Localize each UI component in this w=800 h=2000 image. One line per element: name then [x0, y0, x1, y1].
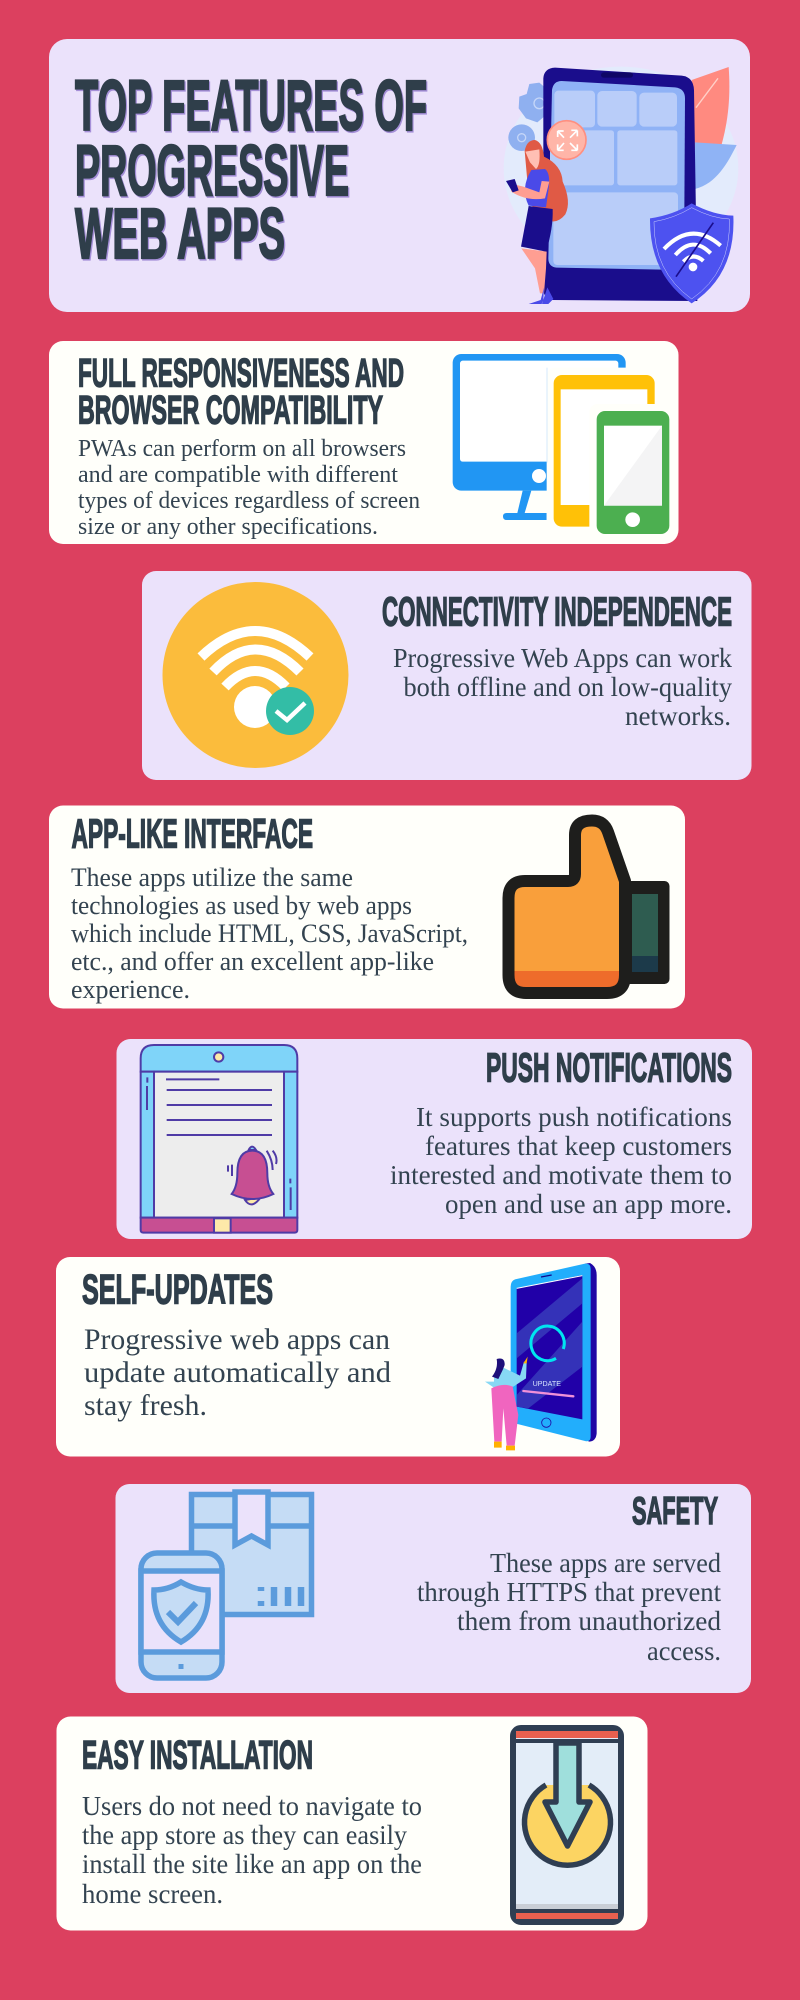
body text: These apps utilize the same [71, 863, 353, 892]
panel: title [49, 39, 750, 312]
body text: etc., and offer an excellent app-like [71, 947, 434, 976]
body text: them from unauthorized [457, 1606, 722, 1636]
body text: through HTTPS that prevent [417, 1577, 721, 1607]
body text: install the site like an app on the [82, 1849, 422, 1879]
body text: both offline and on low-quality [404, 672, 732, 702]
body text [390, 1102, 732, 1219]
body text: interested and motivate them to [390, 1160, 732, 1190]
body text: home screen. [82, 1879, 223, 1909]
title heading: PROGRESSIVE [75, 132, 349, 211]
body text: experience. [71, 975, 190, 1004]
panel: connectivity independence [142, 571, 752, 780]
title heading: PROGRESSIVE [76, 134, 350, 212]
body text: update automatically and [84, 1356, 391, 1389]
body text [71, 863, 468, 1004]
body text: and are compatible with different [78, 462, 398, 488]
panel: self-updates [56, 1257, 620, 1456]
body text: These apps are served [490, 1548, 721, 1578]
body text [417, 1548, 722, 1666]
body text [78, 436, 420, 540]
icon: monitor, tablet and phone [453, 354, 674, 537]
body text: PWAs can perform on all browsers [78, 436, 406, 462]
title heading: WEB APPS [76, 196, 286, 276]
heading: EASY INSTALLATION [82, 1734, 313, 1778]
body text: stay fresh. [84, 1389, 207, 1422]
body text: which include HTML, CSS, JavaScript, [71, 919, 468, 948]
hero illustration: woman, phone and shield [504, 67, 738, 304]
panel: full responsiveness and browser compatibility [49, 341, 678, 544]
body text: features that keep customers [425, 1131, 732, 1161]
icon: tablet with bell [141, 1045, 297, 1233]
panel: push notifications [116, 1039, 752, 1239]
body text: Users do not need to navigate to [82, 1791, 422, 1821]
body text [84, 1323, 391, 1422]
body text: Progressive Web Apps can work [393, 643, 732, 673]
heading [78, 352, 404, 432]
body text: Progressive web apps can [84, 1323, 390, 1356]
title heading [75, 67, 428, 276]
heading: APP-LIKE INTERFACE [72, 810, 313, 856]
icon: download to phone [513, 1728, 621, 1922]
panel: safety [116, 1484, 751, 1693]
heading: FULL RESPONSIVENESS AND [78, 352, 404, 396]
body text: access. [647, 1636, 721, 1666]
icon: person at update screen [485, 1263, 597, 1450]
body text [393, 643, 732, 731]
body text: open and use an app more. [445, 1189, 732, 1219]
title heading: TOP FEATURES OF [76, 68, 428, 148]
body text: networks. [625, 701, 731, 731]
body text: types of devices regardless of screen [78, 488, 420, 514]
body text: It supports push notifications [416, 1102, 732, 1132]
body text: size or any other specifications. [78, 514, 378, 540]
body text: technologies as used by web apps [71, 891, 412, 920]
heading: BROWSER COMPATIBILITY [78, 388, 383, 432]
icon: thumbs up [508, 820, 670, 993]
body text [82, 1791, 422, 1909]
title heading: WEB APPS [75, 195, 285, 274]
panel: easy installation [56, 1716, 648, 1930]
body text: the app store as they can easily [82, 1820, 407, 1850]
panel: app-like interface [49, 806, 685, 1008]
icon: parcel and phone with shield [141, 1492, 314, 1678]
heading: SELF-UPDATES [82, 1266, 273, 1312]
icon: person at update screen: UPDATE [533, 1381, 561, 1388]
title heading: TOP FEATURES OF [75, 67, 427, 146]
icon: wifi with check [162, 582, 348, 768]
heading: SAFETY [632, 1490, 718, 1533]
